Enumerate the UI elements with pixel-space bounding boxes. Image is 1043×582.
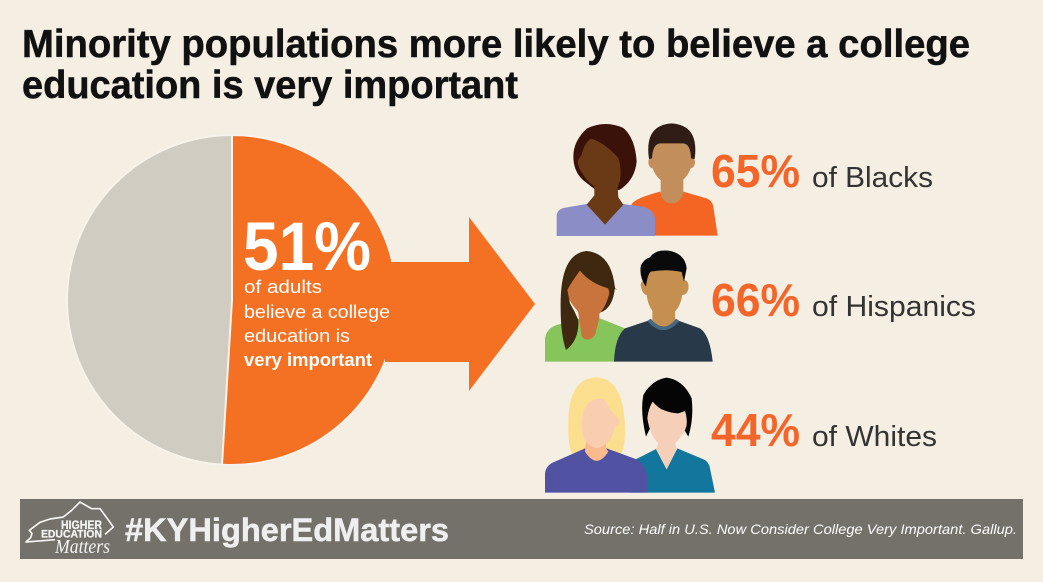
pie callout text: 51% (243, 208, 371, 285)
arrow (385, 217, 535, 391)
pie callout text: of adults (244, 277, 322, 297)
footer bar (20, 499, 1023, 559)
percentage: Hispanics (711, 274, 976, 326)
percentage: Blacks: of Blacks (812, 162, 933, 194)
pie callout text (243, 208, 390, 370)
pie callout text: believe a college (244, 302, 390, 322)
percentage: Blacks: 65% (711, 145, 800, 197)
icon: white woman and person (545, 377, 715, 493)
icon: Hispanic woman and man (545, 250, 713, 362)
percentage: Blacks (711, 145, 933, 197)
hashtag: #KYHigherEdMatters (125, 512, 449, 548)
pie callout text: education is (244, 326, 350, 346)
source: Source: Half in U.S. Now Consider College Very Important. Gallup. (584, 521, 1017, 537)
logo: Higher Education Matters: HIGHER (61, 520, 103, 532)
title: Minority populations more likely to believe a college (22, 23, 970, 66)
percentage: Hispanics: 66% (711, 274, 800, 326)
percentage: Whites (711, 404, 937, 456)
title: education is very important (22, 64, 518, 107)
percentage: Hispanics: of Hispanics (812, 291, 976, 323)
title (22, 23, 970, 107)
logo: Higher Education Matters (26, 502, 113, 558)
logo: Higher Education Matters: EDUCATION (41, 528, 102, 540)
percentage: Whites: 44% (711, 404, 800, 456)
logo: Higher Education Matters: Matters (54, 536, 110, 558)
percentage: Whites: of Whites (812, 421, 937, 453)
pie chart: 51 percent (67, 135, 397, 465)
icon: Black woman and man (557, 123, 718, 236)
pie callout text: very important (244, 350, 372, 370)
